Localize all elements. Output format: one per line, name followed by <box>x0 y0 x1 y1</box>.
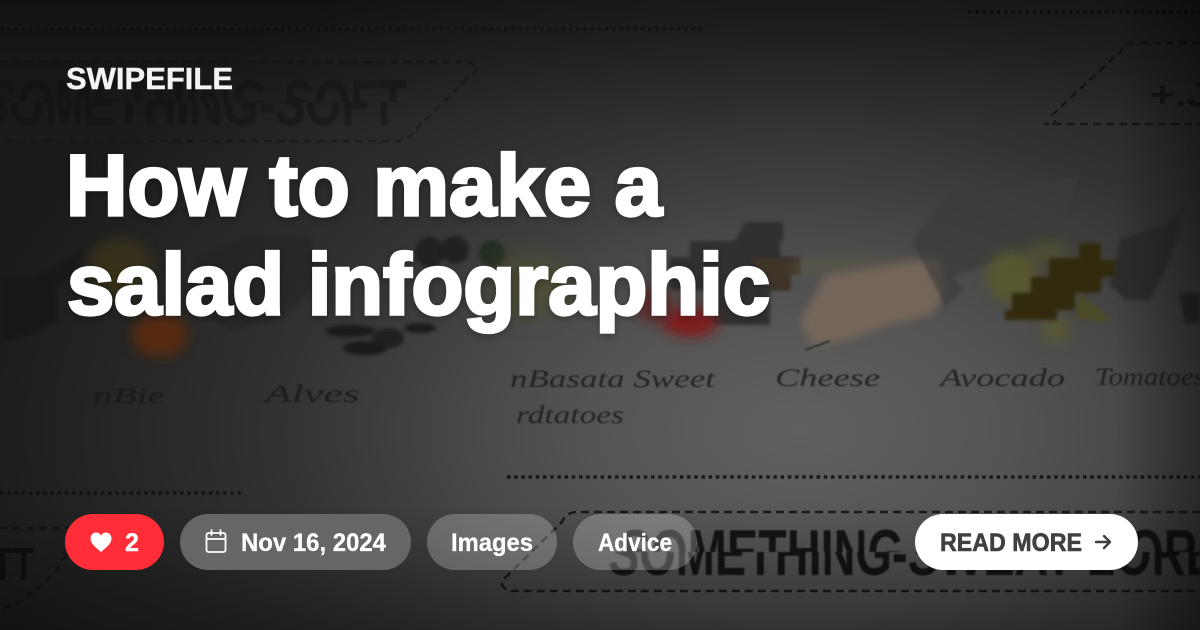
avocado <box>986 251 1038 303</box>
ingredient captions: rdtatoes <box>516 402 624 429</box>
tag: Advice: Advice <box>598 529 672 557</box>
icon: arrow <box>1096 536 1110 548</box>
date text: Nov 16, 2024 <box>241 529 386 557</box>
read more button: READ MORE <box>940 529 1082 557</box>
tag: Advice <box>573 514 697 570</box>
eyebrow: SWIPEFILE: SWIPEFILE <box>66 61 233 96</box>
dark stepped leaf <box>670 222 800 325</box>
title: salad infographic <box>67 237 770 333</box>
icon: heart <box>90 532 112 552</box>
title: How to make a <box>66 138 663 234</box>
left greens, carrot, seeds <box>88 238 152 298</box>
tag: Images <box>427 514 557 570</box>
banner lettering: top left: SOMETHING-SOFT <box>0 67 407 139</box>
ingredient blobs <box>0 177 1200 357</box>
read more button <box>915 514 1138 570</box>
banner lettering: bottom right <box>609 529 1200 576</box>
like count: 2 <box>125 529 139 557</box>
tomato <box>662 307 718 337</box>
ingredient captions <box>93 364 1200 429</box>
ingredient captions: Alves <box>261 381 360 408</box>
likes pill <box>65 514 164 570</box>
title <box>66 138 770 333</box>
banner lettering: top left <box>278 82 406 124</box>
olives <box>415 237 445 267</box>
tag: Images: Images <box>451 529 533 557</box>
banner lettering fragments: +.J <box>1150 76 1200 114</box>
right dark leaves <box>1110 205 1185 300</box>
icon: calendar <box>206 530 226 552</box>
ingredient captions: Cheese <box>775 365 880 392</box>
ingredient captions: Avocado <box>937 365 1065 392</box>
ingredient captions: Tomatoes <box>1095 364 1200 391</box>
grey sprouts <box>912 177 1079 307</box>
ingredient captions: nBasata Sweet <box>510 366 716 393</box>
date pill <box>180 514 411 570</box>
dotted rules <box>0 12 1200 493</box>
ingredient captions: nBie <box>93 383 165 408</box>
cheese <box>790 257 940 275</box>
